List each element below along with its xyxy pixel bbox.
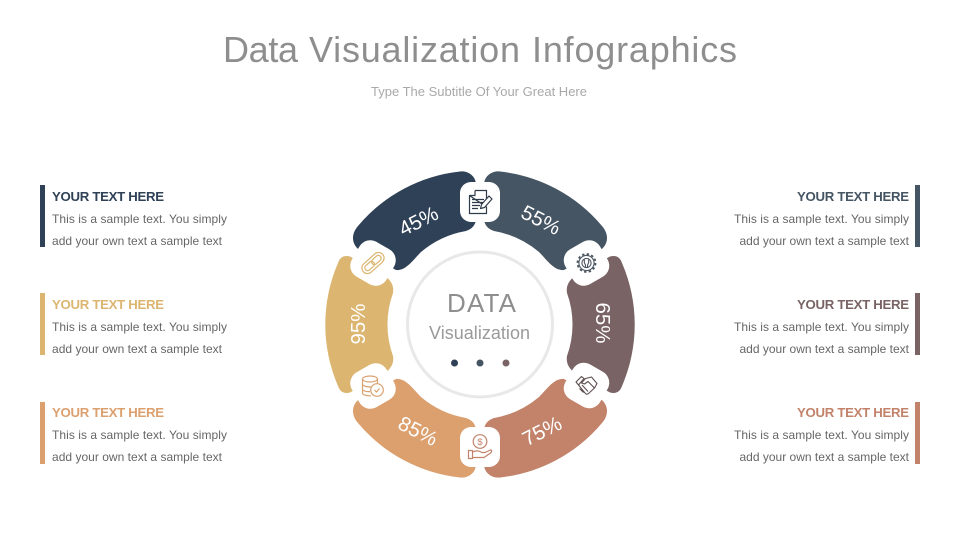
title (223, 29, 737, 70)
panel: right text block 2 (734, 293, 920, 356)
segment: 85%: 85% (394, 412, 441, 451)
panel: left text block 3 (40, 402, 227, 464)
panel: right text block 1 (734, 185, 920, 248)
panel: left text block 3: This is a sample text. You simply (52, 428, 227, 442)
segment: 85% (353, 379, 476, 478)
segment: 55%: 55% (517, 201, 564, 240)
center dots (451, 360, 510, 366)
segment: 45%: 45% (395, 202, 442, 241)
icon: database with check (346, 359, 400, 413)
segment: 65%: 65% (591, 302, 614, 344)
panel: left text block 3: YOUR TEXT HERE (52, 405, 164, 420)
panel: right text block 2: add your own text a sample text (740, 342, 910, 356)
center subheading: Visualization (429, 323, 530, 343)
title: Visualization (309, 29, 520, 70)
panel: right text block 1: add your own text a sample text (740, 234, 910, 248)
icon: handshake (559, 358, 614, 413)
panel: left text block 2: YOUR TEXT HERE (52, 297, 164, 312)
panel: left text block 2: add your own text a sample text (52, 342, 223, 356)
segment: 65% (567, 256, 635, 393)
subtitle: Type The Subtitle Of Your Great Here (371, 84, 587, 99)
icon: hand holding coin (460, 427, 500, 467)
icon: gear with wrench (559, 236, 614, 290)
icon: chain link (346, 236, 400, 290)
icon: document and pencil (460, 182, 500, 222)
segmented ring chart (325, 171, 635, 478)
panel: right text block 2: YOUR TEXT HERE (797, 297, 909, 312)
segment: 75% (484, 379, 607, 478)
segment: 45% (353, 171, 476, 270)
panel: right text block 1: This is a sample text. You simply (734, 212, 909, 226)
title: Data (223, 29, 299, 70)
panel: left text block 1: YOUR TEXT HERE (52, 189, 164, 204)
segment: 95% (325, 256, 393, 393)
panel: left text block 2: This is a sample text. You simply (52, 320, 227, 334)
panel: left text block 3: add your own text a sample text (52, 450, 223, 464)
segment: 95%: 95% (347, 304, 370, 344)
panel: left text block 1 (40, 185, 227, 248)
panel: left text block 2 (40, 293, 227, 356)
icon: hand holding coin: $ (477, 437, 483, 448)
panel: right text block 2: This is a sample text. You simply (734, 320, 909, 334)
panel: left text block 1: This is a sample text. You simply (52, 212, 227, 226)
title: Infographics (532, 29, 737, 70)
center circle (408, 252, 552, 397)
segment: 75%: 75% (519, 412, 566, 451)
panel: right text block 3: This is a sample text. You simply (734, 428, 909, 442)
segment: 55% (484, 171, 607, 270)
panel: right text block 3: add your own text a sample text (740, 450, 910, 464)
panel: right text block 3: YOUR TEXT HERE (797, 405, 909, 420)
center heading: DATA (447, 288, 517, 318)
panel: left text block 1: add your own text a sample text (52, 234, 223, 248)
panel: right text block 1: YOUR TEXT HERE (797, 189, 909, 204)
panel: right text block 3 (734, 402, 920, 464)
